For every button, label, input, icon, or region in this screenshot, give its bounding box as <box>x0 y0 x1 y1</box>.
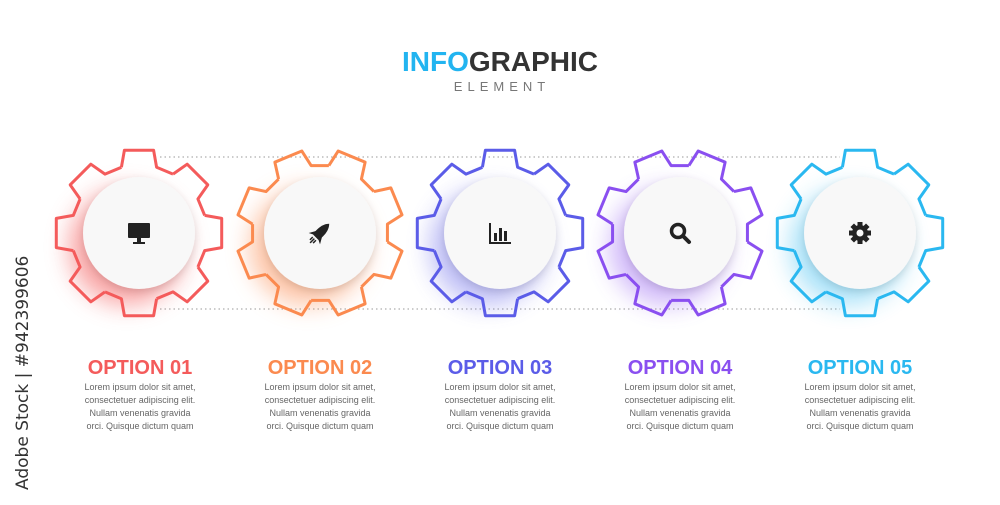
title: INFOGRAPHIC <box>402 46 598 77</box>
gear 3 <box>417 150 583 316</box>
option 4 text: Lorem ipsum dolor sit amet, <box>624 382 736 392</box>
option 3 text: OPTION 03 <box>448 357 552 379</box>
icon: rocket <box>304 218 335 249</box>
option 5 text: Lorem ipsum dolor sit amet, <box>804 382 916 392</box>
option 3 text: Lorem ipsum dolor sit amet, <box>444 382 556 392</box>
option 2 text <box>264 357 376 431</box>
option 1 text: orci. Quisque dictum quam <box>86 421 194 431</box>
option 4 text: Nullam venenatis gravida <box>629 408 731 418</box>
option 2 text: OPTION 02 <box>268 357 372 379</box>
option 4 text: consectetuer adipiscing elit. <box>625 395 735 405</box>
option 5 text: consectetuer adipiscing elit. <box>805 395 915 405</box>
option 1 text <box>84 357 196 431</box>
icon: bar chart <box>489 223 511 244</box>
option 3 text: orci. Quisque dictum quam <box>446 421 554 431</box>
option 3 text: Nullam venenatis gravida <box>449 408 551 418</box>
option 2 text: Nullam venenatis gravida <box>269 408 371 418</box>
option 2 text: consectetuer adipiscing elit. <box>265 395 375 405</box>
option 5 text <box>804 357 916 431</box>
title: ELEMENT <box>454 79 550 94</box>
option 4 text: orci. Quisque dictum quam <box>626 421 734 431</box>
option 4 text: OPTION 04 <box>628 357 733 379</box>
gear 5 <box>777 150 943 316</box>
icon: magnifier <box>672 224 689 242</box>
option 3 text <box>444 357 556 431</box>
option 1 text: Nullam venenatis gravida <box>89 408 191 418</box>
option 1 text: OPTION 01 <box>88 357 192 379</box>
icon: monitor <box>128 223 150 244</box>
gear 4 <box>572 125 788 341</box>
option 5 text: OPTION 05 <box>808 357 912 379</box>
icon: cog <box>849 222 871 244</box>
option 2 text: Lorem ipsum dolor sit amet, <box>264 382 376 392</box>
gear 2 <box>212 125 428 341</box>
option 2 text: orci. Quisque dictum quam <box>266 421 374 431</box>
option 5 text: orci. Quisque dictum quam <box>806 421 914 431</box>
title <box>402 46 598 94</box>
watermark: Adobe Stock | #942399606 <box>13 256 33 490</box>
gear 1 <box>56 150 222 316</box>
option 1 text: consectetuer adipiscing elit. <box>85 395 195 405</box>
option 4 text <box>624 357 736 431</box>
option 5 text: Nullam venenatis gravida <box>809 408 911 418</box>
option 3 text: consectetuer adipiscing elit. <box>445 395 555 405</box>
option 1 text: Lorem ipsum dolor sit amet, <box>84 382 196 392</box>
